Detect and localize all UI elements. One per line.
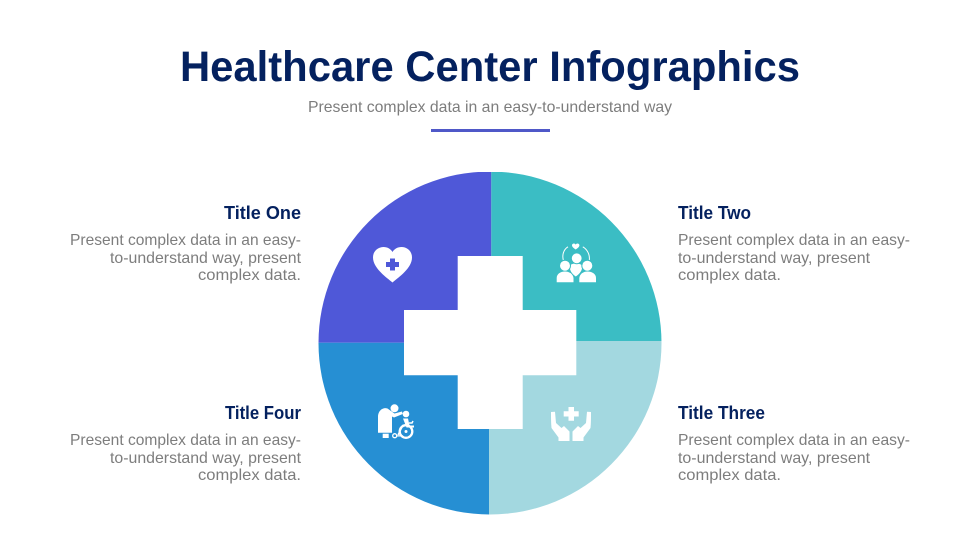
text block: title three: complex data. (678, 467, 781, 484)
quadrant: title three (489, 341, 662, 515)
title: Healthcare Center Infographics (180, 43, 800, 91)
text block: title four (70, 403, 302, 484)
text block: title two (678, 203, 910, 284)
circle diagram (318, 172, 662, 515)
text block: title four: to-understand way, present (110, 450, 302, 467)
text block: title three: to-understand way, present (678, 450, 871, 467)
quadrant: title two (491, 172, 662, 341)
text block: title three: Present complex data in an easy- (678, 432, 910, 449)
text block: title one: complex data. (198, 267, 301, 284)
text block: title three: Title Three (678, 403, 765, 423)
title underline (431, 129, 550, 132)
text block: title one: to-understand way, present (110, 250, 302, 267)
text block: title two: to-understand way, present (678, 250, 871, 267)
text block: title four: complex data. (198, 467, 301, 484)
subtitle: Present complex data in an easy-to-understand way (308, 99, 672, 116)
infographic (71, 50, 910, 514)
center cross (404, 256, 576, 429)
icon: group of people with heart (557, 243, 596, 282)
icon: heart with cross (373, 247, 412, 282)
quadrant: title one (318, 172, 491, 343)
quadrant: title four (318, 343, 489, 515)
text block: title two: Present complex data in an easy- (678, 232, 910, 249)
text block: title one (70, 203, 302, 284)
text block: title one: Present complex data in an easy- (70, 232, 301, 249)
text block: title one: Title One (224, 203, 301, 223)
text block: title four: Title Four (225, 403, 301, 423)
text block: title three (678, 403, 910, 484)
text block: title two: Title Two (678, 203, 751, 223)
icon: hands holding cross (551, 407, 591, 441)
text block: title four: Present complex data in an easy- (70, 432, 301, 449)
icon: caregiver with wheelchair (378, 404, 414, 438)
text block: title two: complex data. (678, 267, 781, 284)
